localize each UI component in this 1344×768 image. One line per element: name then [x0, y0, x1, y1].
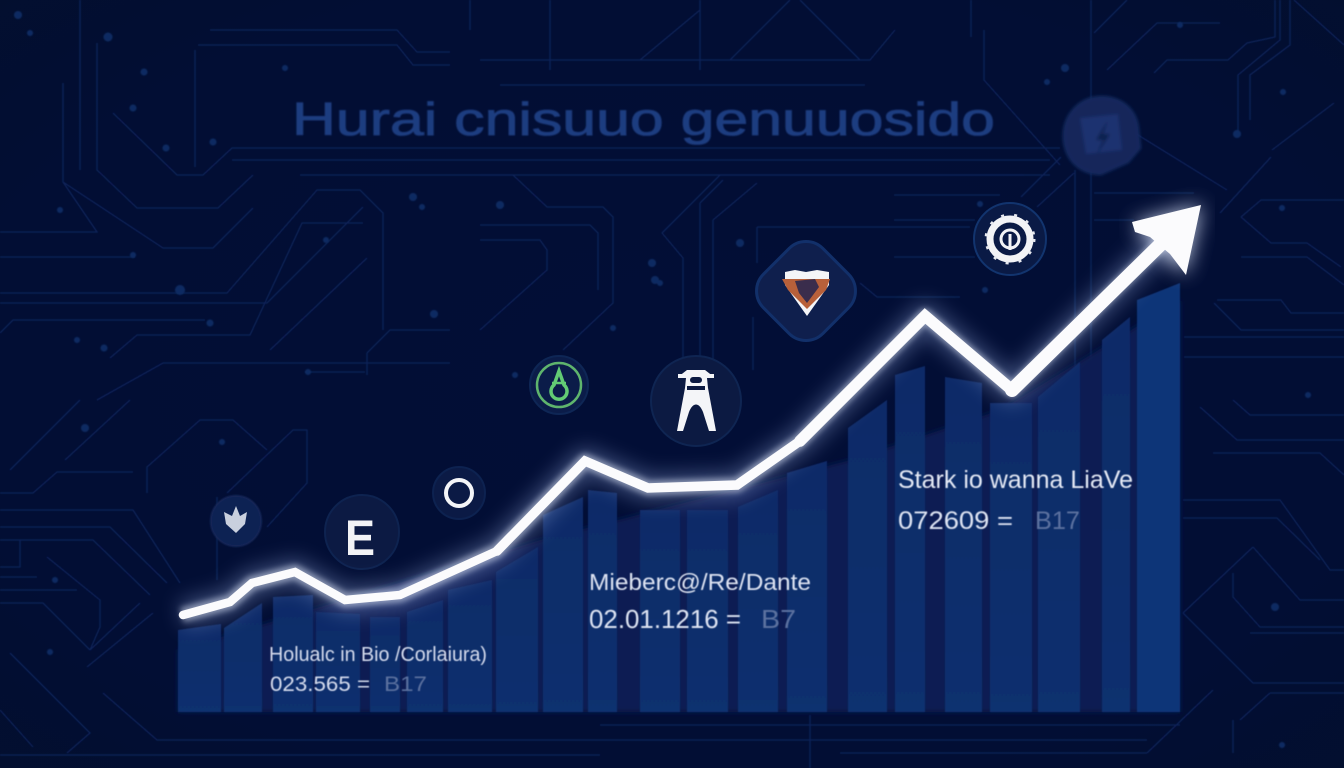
- arrow line: [183, 240, 1165, 615]
- icon: lightning shield: [1064, 97, 1140, 174]
- icon: green ring: [530, 356, 588, 414]
- icon: tower: [651, 356, 741, 446]
- label: second milestone: B7: [761, 604, 796, 634]
- label: first milestone: Holualc in Bio /Corlaiura): [269, 644, 487, 666]
- label: third milestone: [898, 466, 1133, 535]
- label: second milestone: 02.01.1216 =: [589, 604, 741, 634]
- label: second milestone: [589, 569, 811, 634]
- title: Hurai cnisuuo genuuosido: [292, 93, 995, 145]
- label: third milestone: 072609 =: [898, 507, 1013, 535]
- icon: down arrow badge: [211, 496, 261, 546]
- chart backing panel: [178, 300, 1180, 712]
- arrow glow: [182, 235, 1170, 615]
- label: third milestone: B17: [1035, 507, 1080, 535]
- arrowhead: [1132, 205, 1201, 275]
- icon: ring: [433, 467, 485, 519]
- trend arrow: [182, 205, 1201, 615]
- label: second milestone: Mieberc@/Re/Dante: [589, 569, 811, 595]
- icon: letter E: [325, 495, 399, 569]
- bars: [178, 283, 1180, 712]
- bar chart: [178, 283, 1180, 712]
- label: first milestone: 023.565 =: [270, 673, 370, 696]
- icon: letter E: E: [345, 510, 375, 566]
- icon: diamond shield: [747, 232, 865, 350]
- icon: gear badge: [974, 203, 1046, 275]
- label: first milestone: [269, 644, 487, 696]
- label: third milestone: Stark io wanna LiaVe: [898, 466, 1133, 494]
- label: first milestone: B17: [384, 673, 427, 696]
